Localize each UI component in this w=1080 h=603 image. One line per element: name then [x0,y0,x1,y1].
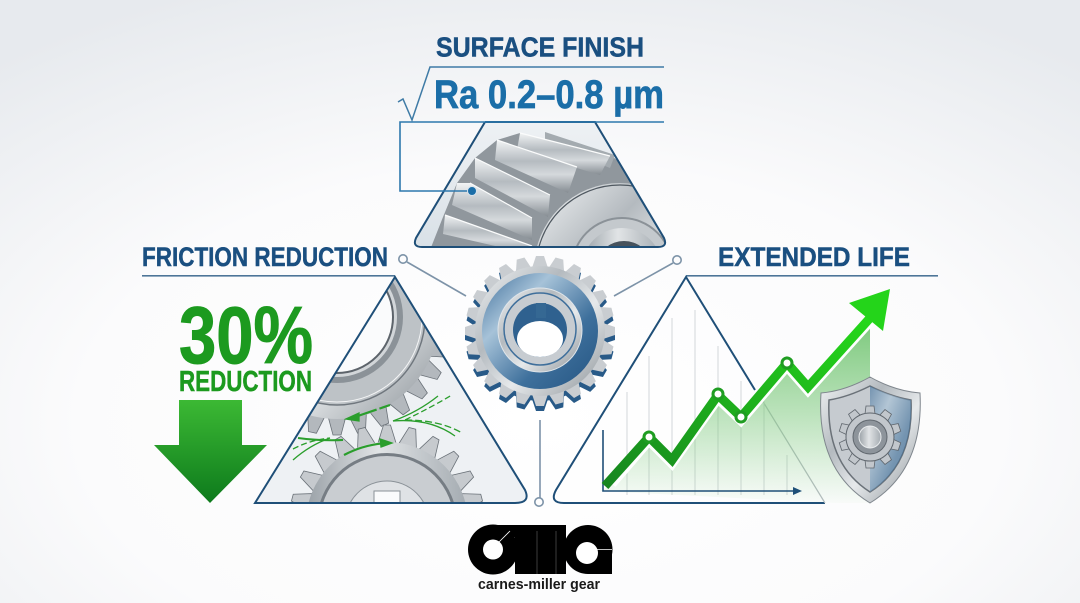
growth arrowhead [849,289,890,331]
connector lines [399,255,681,506]
heading: extended life: EXTENDED LIFE [718,242,910,272]
friction flow lines [293,395,462,460]
chart area fill [600,321,870,503]
heading: friction reduction: FRICTION REDUCTION [142,242,388,272]
logo [468,524,612,593]
panel: extended life chart [554,277,890,503]
heading: surface finish: SURFACE FINISH [436,32,644,62]
logo wordmark: carnes-miller gear [478,576,600,593]
chart triangle outline [554,277,825,503]
value: Ra 0.2–0.8 µm: Ra 0.2–0.8 µm [434,73,664,117]
growth line [612,322,870,484]
chart axes [603,430,796,491]
panel: friction reduction meshing gears [253,275,528,504]
panel: surface finish gear triangle [414,121,666,248]
chart gridlines [627,310,787,495]
stat: 30%: 30% [179,291,313,381]
callout: roughness symbol and leader [398,67,664,196]
logo mark [468,524,612,574]
data points [644,358,792,442]
arrow: down [154,400,267,503]
icon: shield with gear [821,377,920,503]
central gear [465,256,615,411]
stat label: reduction: REDUCTION [179,366,312,398]
